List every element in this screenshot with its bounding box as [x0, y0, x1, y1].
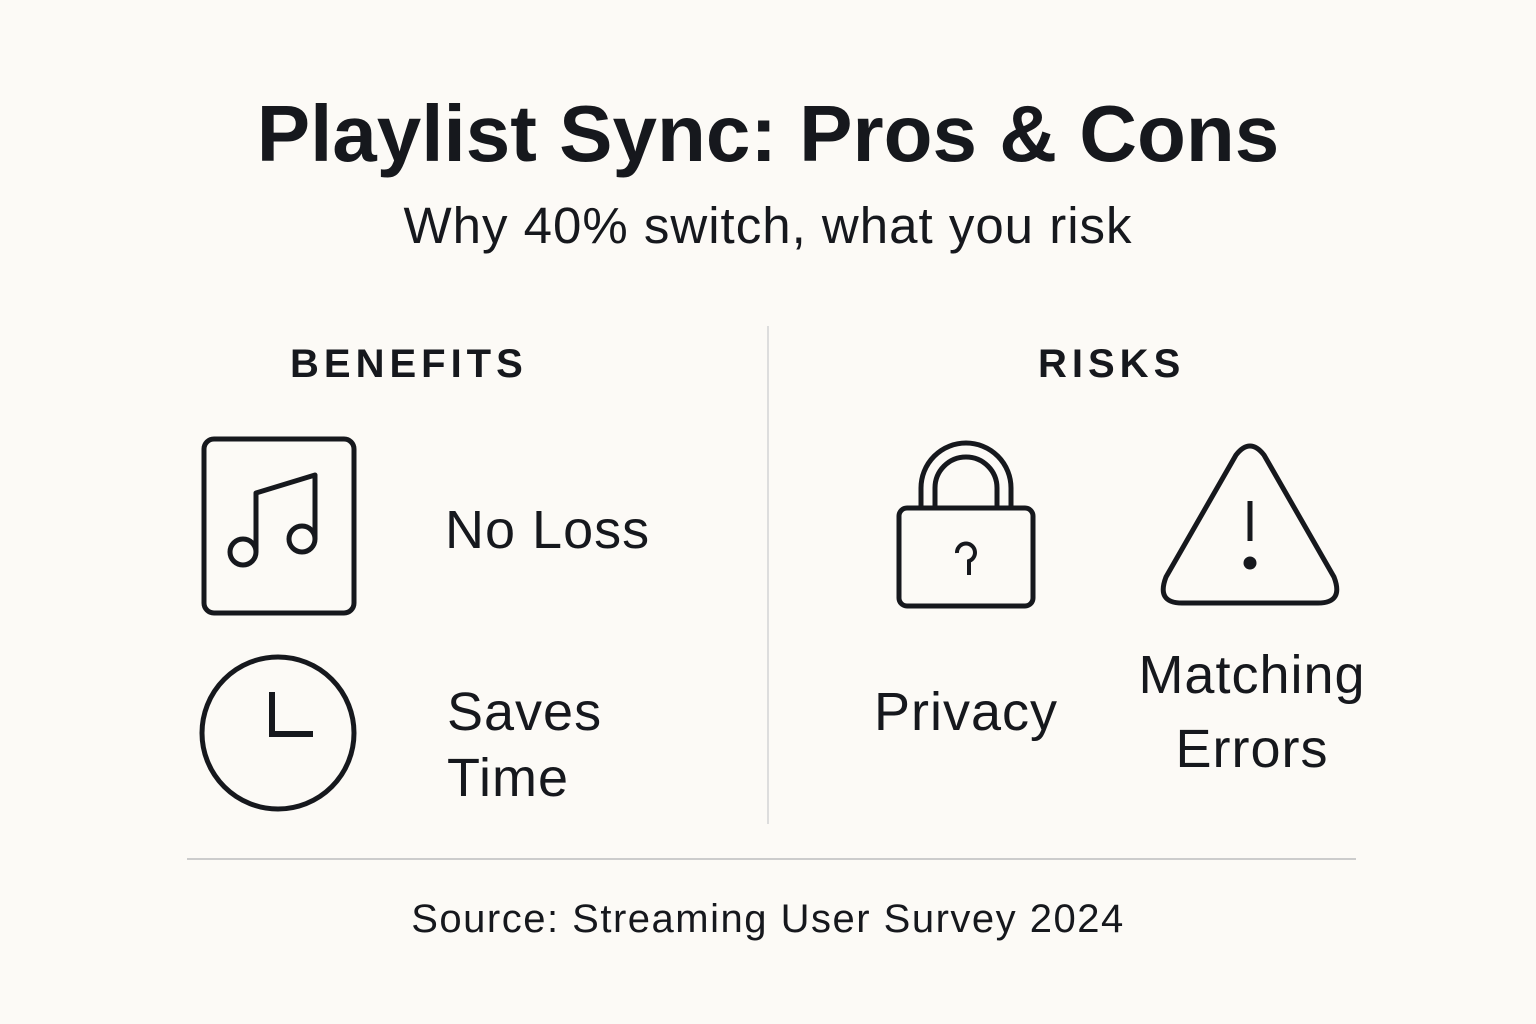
label: privacy: Privacy — [874, 682, 1058, 742]
label: saves time: Time — [447, 748, 569, 808]
label: saves time: Saves — [447, 682, 602, 742]
icon: warning — [1160, 444, 1340, 606]
label: no loss: No Loss — [445, 500, 650, 560]
label: matching errors — [1138, 645, 1366, 779]
icon: clock — [200, 654, 356, 812]
label: matching errors: Errors — [1176, 719, 1328, 779]
icon: music note — [202, 436, 356, 616]
title: Playlist Sync: Pros & Cons — [257, 89, 1279, 178]
divider horizontal — [187, 858, 1356, 860]
label: matching errors: Matching — [1138, 645, 1366, 705]
icon: lock — [896, 440, 1036, 608]
heading: benefits: BENEFITS — [290, 342, 528, 386]
heading: risks: RISKS — [1038, 342, 1185, 386]
source: Source: Streaming User Survey 2024 — [411, 897, 1125, 941]
divider vertical — [767, 326, 769, 824]
subtitle: Why 40% switch, what you risk — [403, 197, 1133, 254]
label: saves time — [447, 682, 602, 808]
